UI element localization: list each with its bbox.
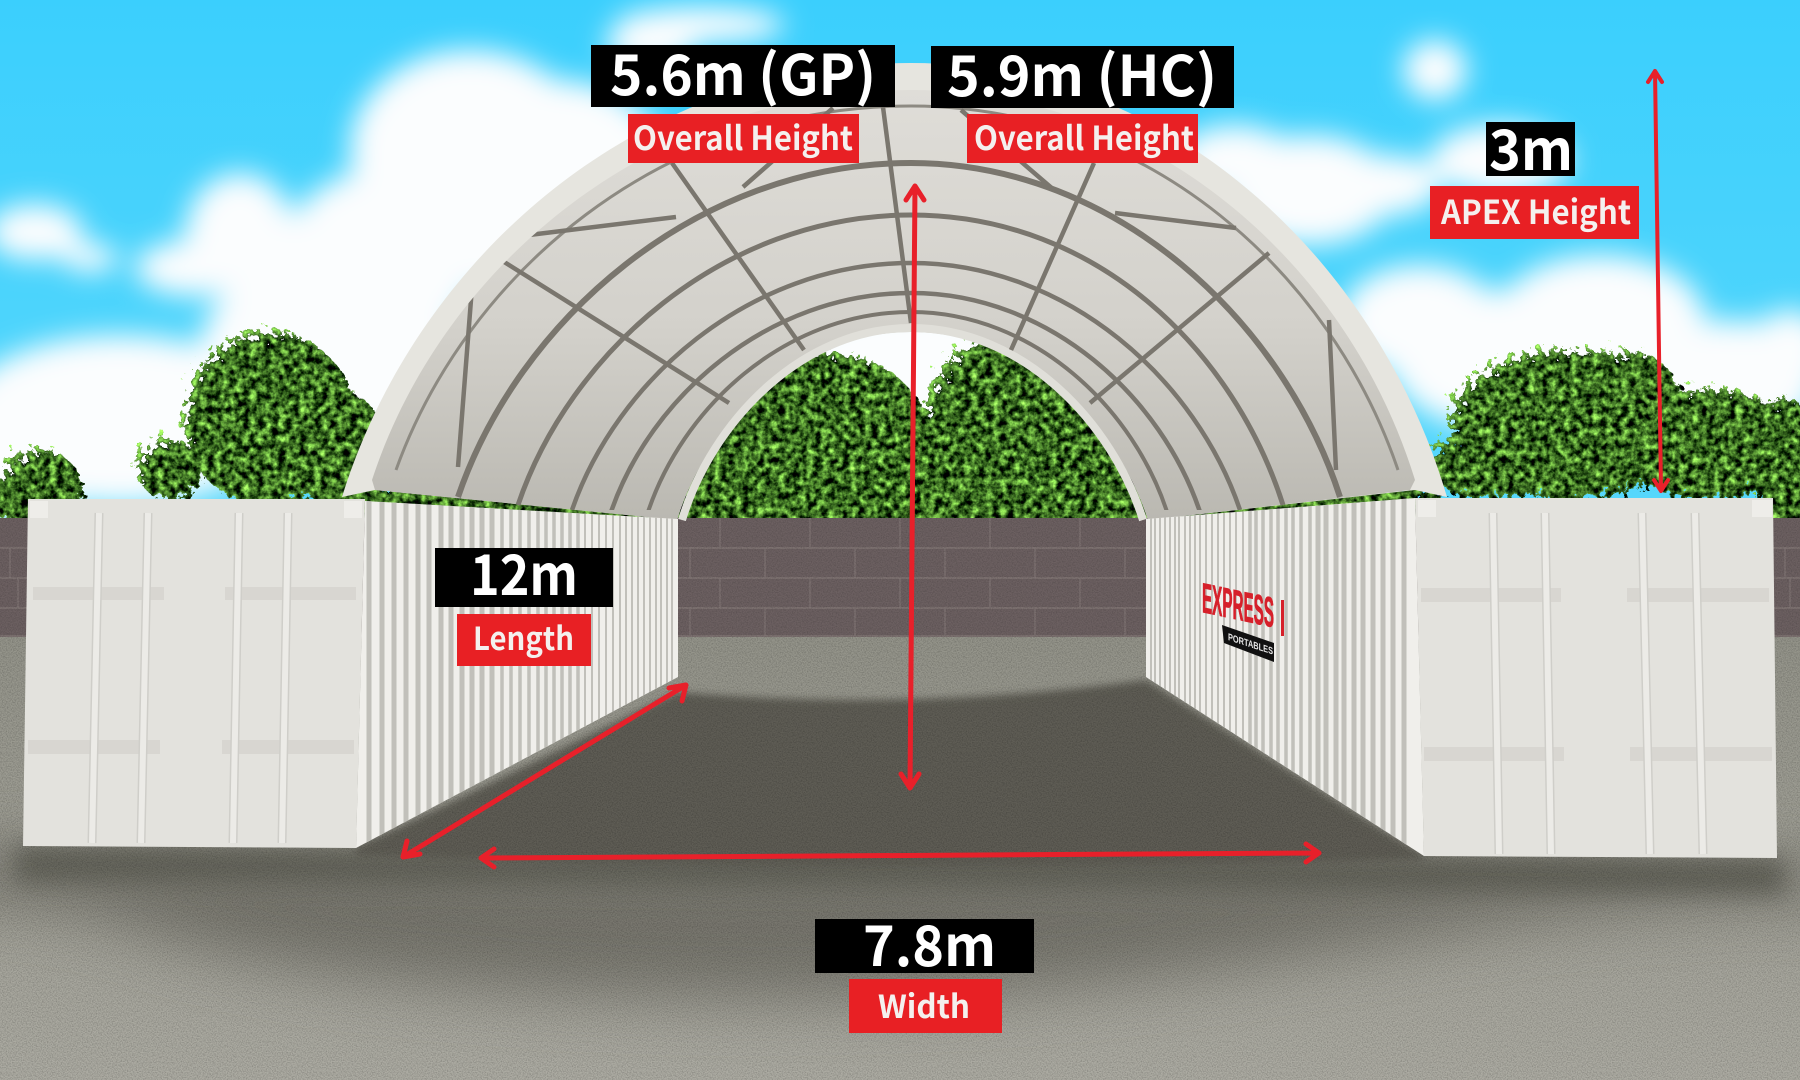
background trees [0, 332, 1800, 540]
left container doors [23, 499, 365, 848]
label: 5.6m GP: 5.6m (GP) [610, 31, 876, 112]
opening rim [682, 328, 1143, 520]
label: 12m [435, 531, 613, 612]
right door corner castings [1418, 500, 1772, 517]
label: overall height GP: Overall Height [633, 112, 853, 160]
left door bands [28, 587, 356, 754]
label: width: Width [878, 982, 970, 1028]
label: 7.8m [815, 902, 1034, 983]
label: apex height: APEX Height [1440, 186, 1631, 234]
label: 3m: 3m [1489, 106, 1573, 187]
label: 5.9m HC: 5.9m (HC) [947, 32, 1217, 113]
left door corner castings [30, 501, 362, 518]
arch interior membrane [372, 90, 1415, 520]
right container [1146, 490, 1777, 860]
arch ribs [396, 106, 1398, 515]
right container side [1146, 498, 1424, 856]
right container doors [1415, 498, 1777, 858]
arrow: length [403, 685, 686, 857]
ground [0, 637, 1800, 1080]
left door bars [92, 513, 288, 843]
left corrugation [369, 500, 672, 850]
left container [23, 499, 678, 850]
label: overall height HC: Overall Height [974, 112, 1194, 160]
clouds [0, 7, 1800, 520]
Express Portables logo: EXPRESS [1202, 575, 1274, 637]
arrow: overall height [901, 186, 924, 788]
label: 7.8m: 7.8m [863, 902, 996, 983]
left container side [356, 501, 678, 848]
right corrugation [1151, 490, 1404, 860]
Express Portables logo: PORTABLES [1228, 632, 1273, 658]
Express Portables logo [1202, 575, 1284, 662]
label: 12m: 12m [470, 531, 578, 612]
label: width [849, 979, 1002, 1033]
right door bands [1421, 588, 1772, 761]
arrow: width [481, 844, 1319, 867]
brick wall [0, 518, 1800, 638]
right door bars [1493, 513, 1703, 854]
label: length: Length [473, 614, 574, 660]
arrow: apex height [1648, 71, 1668, 491]
fabric arch roof [342, 63, 1447, 520]
sky background [0, 0, 1800, 640]
arch outer shell [342, 63, 1447, 520]
